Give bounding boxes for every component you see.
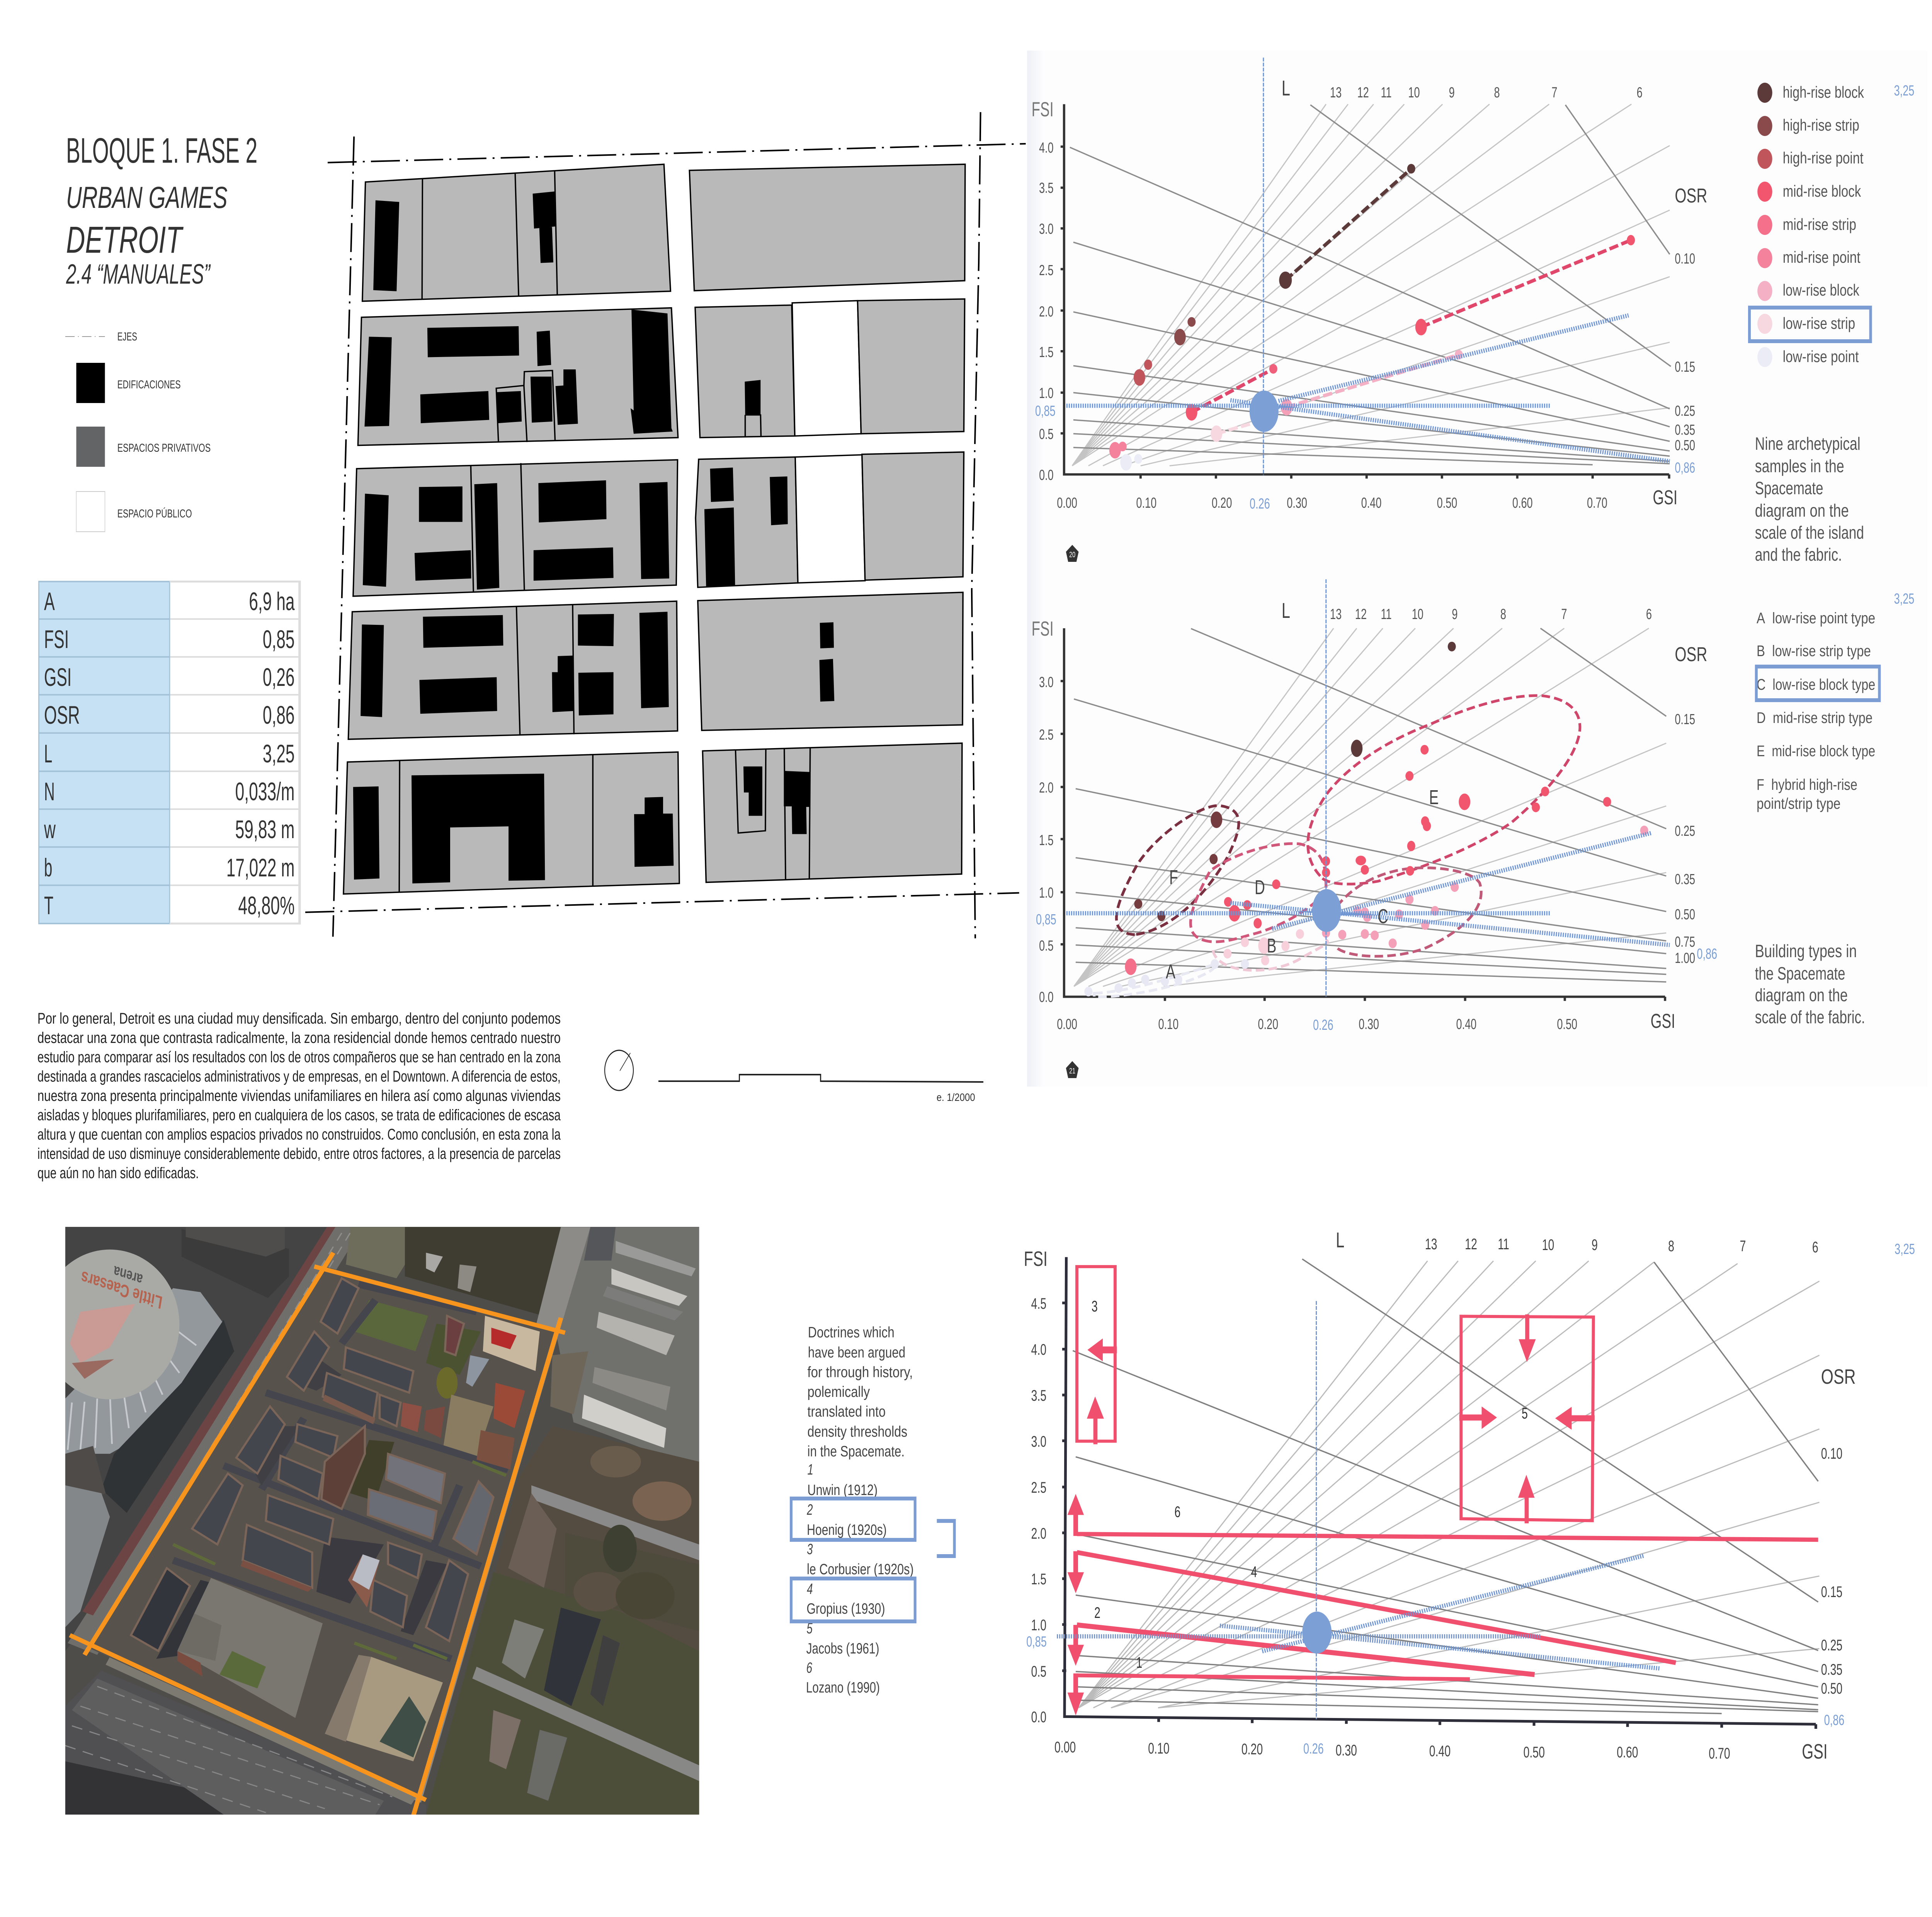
chart 3 axis labels: 0.10 — [1821, 1445, 1842, 1462]
chart 3 axis labels: 0.15 — [1821, 1584, 1842, 1601]
chart 2 page icon: 21 — [1069, 1067, 1075, 1075]
description paragraph: nuestra zona presenta principalmente viviendas unifamiliares en hilera así como algunas viviendas — [37, 1087, 561, 1104]
chart 1 axis labels: 1.0 — [1039, 384, 1054, 401]
data table: FSI — [44, 625, 69, 654]
chart 3 axis labels: 0.5 — [1031, 1663, 1046, 1680]
chart 2 type legend: D mid-rise strip type — [1757, 709, 1872, 726]
chart 1 axis labels: 0.35 — [1675, 421, 1695, 438]
chart 1 axis labels: 13 — [1330, 84, 1342, 100]
description paragraph: que aún no han sido edificadas. — [37, 1165, 199, 1182]
data table: 48,80% — [238, 891, 295, 920]
photo: residential buildings — [131, 1278, 493, 1651]
chart 3 blue values: 3,25 — [1895, 1240, 1915, 1257]
chart 2 type legend: A low-rise point type — [1757, 610, 1875, 627]
chart 2 type letters: A — [1166, 960, 1176, 983]
photo: green lots and trees — [350, 1300, 493, 1501]
description paragraph: estudio para comparar así los resultados con los de otros compañeros que se han centrado en la zona — [37, 1049, 561, 1066]
chart 2 type letters: F — [1169, 866, 1178, 889]
data table: L — [44, 740, 52, 768]
chart 3 axis labels: 1.5 — [1031, 1571, 1046, 1588]
chart 1 axis labels: 0.30 — [1287, 494, 1307, 511]
chart 3 axis labels: 0.0 — [1031, 1709, 1046, 1726]
doctrines list: Gropius (1930) — [806, 1600, 885, 1617]
chart 1 axis labels: 0.60 — [1512, 494, 1533, 511]
chart 1 blue site overlay — [1066, 58, 1670, 475]
chart 2 type letters: E — [1429, 786, 1439, 809]
chart 1 axis labels: 0.10 — [1136, 494, 1156, 511]
chart 3 blue values: 0,85 — [1026, 1633, 1047, 1650]
doctrines list: Lozano (1990) — [806, 1679, 880, 1696]
chart 3 axis labels: 6 — [1812, 1239, 1818, 1256]
chart 2 caption: Building types in — [1755, 942, 1857, 961]
photo: parking lot and hipped roof — [325, 1655, 443, 1761]
data table: T — [44, 891, 53, 920]
chart 1 type legend: high-rise strip — [1783, 116, 1859, 134]
chart 2 type letters: B — [1267, 934, 1276, 957]
chart 2 axis labels: 0.30 — [1359, 1015, 1379, 1032]
chart 1 axis labels: 0.00 — [1057, 494, 1077, 511]
chart 1 axis labels: 0.5 — [1039, 425, 1054, 442]
chart 2 OSR lines — [1074, 628, 1666, 982]
doctrines list: 2 — [806, 1501, 813, 1518]
chart 3 axis labels: 4.5 — [1031, 1295, 1046, 1312]
chart 2 axis labels: 0.0 — [1039, 988, 1054, 1005]
chart 2 blue values: 0,85 — [1036, 911, 1056, 927]
chart 2 caption: diagram on the — [1755, 986, 1848, 1005]
chart 2 axis labels: 0.50 — [1557, 1015, 1577, 1032]
chart 2 legend highlight box — [1756, 667, 1879, 700]
chart 1 type legend — [1757, 83, 1864, 367]
chart 3 axis labels: 1.0 — [1031, 1617, 1046, 1634]
data table: 0,033/m — [235, 777, 295, 806]
chart 1 caption: and the fabric. — [1755, 545, 1842, 565]
chart 3 axis labels: 4.0 — [1031, 1341, 1046, 1358]
doctrines list: for through history, — [808, 1364, 913, 1381]
chart 1 axis labels: 9 — [1449, 84, 1455, 100]
chart 2 axis labels: 3.0 — [1039, 674, 1054, 690]
chart 2 axis labels: 6 — [1646, 606, 1652, 622]
chart 1 axis labels: FSI — [1032, 98, 1054, 121]
chart 2 type letters: D — [1255, 876, 1265, 899]
legend: edificaciones — [76, 363, 181, 403]
chart 3 axis labels: L — [1336, 1228, 1344, 1252]
photo: arena lettering: Little Caesars — [80, 1267, 164, 1312]
chart 2 axis labels: 0.75 — [1675, 933, 1695, 950]
chart 1 axis labels: 2.5 — [1039, 262, 1054, 278]
title block: DETROIT — [66, 219, 184, 261]
data table: b — [44, 854, 52, 882]
chart 1 axis labels: 12 — [1357, 84, 1369, 100]
data table: 6,9 ha — [249, 587, 295, 616]
photo: large apartment block — [177, 1578, 323, 1718]
chart 1 type legend: low-rise point — [1783, 347, 1859, 366]
chart 2 axis labels: 2.0 — [1039, 779, 1054, 796]
chart 3 axis labels: GSI — [1802, 1740, 1828, 1763]
chart 3 arrows — [1068, 1314, 1595, 1715]
chart 2 type letters: C — [1378, 905, 1388, 928]
photo: orange site outline — [70, 1253, 565, 1816]
doctrines list: 3 — [807, 1541, 813, 1558]
legend: espacios privativos: ESPACIOS PRIVATIVOS — [117, 441, 211, 454]
chart 1 type legend: mid-rise block — [1783, 182, 1861, 200]
chart 2 axis labels: 12 — [1355, 606, 1367, 622]
chart 2 blue values: 0,86 — [1697, 945, 1717, 962]
photo: arena — [65, 1227, 289, 1627]
chart 1 axis labels: 4.0 — [1039, 139, 1054, 156]
chart 3 axis labels: 0.35 — [1821, 1661, 1842, 1678]
site axes — [305, 112, 1026, 938]
chart 3 axis labels: 12 — [1465, 1236, 1477, 1253]
chart 1 type legend: low-rise strip — [1783, 314, 1855, 332]
chart 3 doctrine numbers: 6 — [1174, 1504, 1180, 1521]
chart 2 axis labels: L — [1282, 599, 1290, 623]
doctrines list: 6 — [806, 1659, 812, 1676]
doctrines list: Hoenig (1920s) — [807, 1521, 887, 1538]
chart 3 doctrine numbers: 1 — [1136, 1654, 1142, 1671]
site plan map — [305, 112, 1026, 938]
chart 3 axis labels: 0.70 — [1709, 1745, 1730, 1762]
chart 2 caption: scale of the fabric. — [1755, 1008, 1865, 1027]
chart 2 axis labels: 0.15 — [1675, 711, 1695, 727]
chart 2 type legend: B low-rise strip type — [1757, 643, 1871, 660]
chart 3 doctrine numbers: 3 — [1092, 1298, 1098, 1315]
map legend — [65, 330, 211, 532]
chart 2 caption: the Spacemate — [1755, 964, 1845, 983]
chart 2 axis labels: 0.20 — [1258, 1015, 1278, 1032]
block row 1 — [362, 164, 965, 301]
photo: neighbouring buildings — [426, 1227, 699, 1801]
chart 1 axis labels: 3.5 — [1039, 179, 1054, 196]
chart 3 doctrine numbers: 4 — [1251, 1563, 1257, 1580]
doctrines list: le Corbusier (1920s) — [807, 1561, 914, 1578]
chart 1 blue values: 0,86 — [1675, 459, 1695, 476]
chart 1 axis labels: 0.20 — [1212, 494, 1232, 511]
description paragraph: aisladas y bloques plurifamiliares, pero en cualquiera de los casos, se trata de edificaciones de escasa — [37, 1107, 561, 1124]
chart 3 axis labels: 9 — [1592, 1237, 1598, 1254]
chart 3 blue values: 0.26 — [1303, 1740, 1324, 1757]
chart 3 OSR lines — [1073, 1259, 1818, 1713]
block row 5 — [344, 743, 962, 894]
description paragraph: destacar una zona que contrasta radicalmente, la zona residencial donde hemos centrado nuestro — [37, 1029, 561, 1046]
chart 1 axis labels: 0.40 — [1361, 494, 1381, 511]
chart 3 doctrine thresholds — [1077, 1267, 1818, 1679]
chart 1 axis labels: 10 — [1408, 84, 1420, 100]
chart 1 axis labels: 7 — [1551, 84, 1557, 100]
data table: 0,26 — [263, 663, 295, 692]
chart 2 axis labels: 1.0 — [1039, 884, 1054, 901]
chart 2 type legend: F hybrid high-rise — [1757, 776, 1857, 793]
chart 1 density rays — [1072, 104, 1670, 466]
chart 2 density rays — [1074, 628, 1666, 987]
data table: A — [44, 587, 55, 616]
chart 2 blue values — [1036, 590, 1914, 1033]
chart 1 caption: samples in the — [1755, 457, 1844, 476]
chart 3 axis labels: 0.50 — [1523, 1744, 1545, 1761]
chart 2 type letters — [1166, 786, 1439, 983]
data table: 0,85 — [263, 625, 295, 654]
chart 1 axis labels: L — [1282, 76, 1290, 100]
doctrines list: Doctrines which — [808, 1324, 895, 1341]
block row 4 — [348, 592, 963, 739]
chart 2 axis labels: 1.5 — [1039, 832, 1054, 848]
chart 2 axis labels: 8 — [1500, 606, 1506, 622]
chart 2 axis labels: 0.5 — [1039, 937, 1054, 954]
block row 3 — [353, 452, 964, 596]
chart 3 axis labels: 0.10 — [1148, 1740, 1170, 1757]
chart 3 axis labels: 11 — [1498, 1236, 1509, 1253]
chart 1 axis labels: 3.0 — [1039, 220, 1054, 237]
chart 1 axis labels: 0.10 — [1675, 250, 1695, 267]
chart 2 blue site overlay — [1066, 579, 1670, 997]
chart 2 page icon — [1066, 1061, 1078, 1078]
chart 1 axis labels: GSI — [1653, 486, 1677, 509]
photo: surrounding ground — [65, 1227, 699, 1815]
chart 1 axis labels: 0.70 — [1587, 494, 1607, 511]
chart 1 type legend: high-rise point — [1783, 149, 1864, 167]
chart 1 caption: diagram on the — [1755, 501, 1849, 520]
chart 3 blue site overlay — [1057, 1301, 1660, 1719]
chart 1 caption — [1755, 434, 1864, 565]
title block — [66, 131, 257, 290]
chart 2 axes — [1061, 628, 1665, 1001]
chart 1 type legend: high-rise block — [1783, 83, 1864, 101]
chart 1 page icon: 20 — [1069, 550, 1075, 559]
chart 1 blue values: 3,25 — [1894, 82, 1914, 99]
description paragraph: destinada a grandes rascacielos administrativos y de empresas, en el Downtown. A diferencia de estos, — [37, 1068, 561, 1085]
chart 3 axis labels: 10 — [1542, 1237, 1554, 1254]
chart 1 axis labels: 0.50 — [1437, 494, 1457, 511]
chart 2 axis labels: 7 — [1561, 606, 1567, 622]
chart 3 blue values — [1026, 1240, 1915, 1757]
chart 3 axis labels: 2.5 — [1031, 1479, 1046, 1496]
description paragraph: Por lo general, Detroit es una ciudad muy densificada. Sin embargo, dentro del conjunto podemos — [37, 1010, 561, 1027]
legend: edificaciones: EDIFICACIONES — [117, 378, 181, 391]
doctrines list: density thresholds — [808, 1423, 907, 1440]
doctrines list: polemically — [808, 1383, 870, 1400]
chart 2 blue values: 0.26 — [1313, 1016, 1333, 1033]
chart 3 axis labels: 3.0 — [1031, 1433, 1046, 1450]
chart 3 axes — [1062, 1257, 1816, 1729]
chart 1 axis labels: 0.15 — [1675, 358, 1695, 375]
chart 1 legend highlight box — [1750, 308, 1871, 341]
doctrines list: have been argued — [808, 1344, 905, 1361]
chart 3 axis labels: 7 — [1740, 1238, 1746, 1255]
chart 2 axis labels: 0.50 — [1675, 906, 1695, 922]
chart 2 axis labels: 0.40 — [1456, 1015, 1476, 1032]
block row 2 — [358, 299, 965, 446]
chart 2 axis labels: 13 — [1330, 606, 1342, 622]
chart 2 axis labels: 1.00 — [1675, 949, 1695, 966]
chart 2 blue values: 3,25 — [1894, 590, 1914, 607]
aerial photo of the site — [40, 1227, 699, 1816]
chart 2 type clusters — [1094, 696, 1580, 997]
legend: ejes: EJES — [117, 330, 137, 343]
chart 3 axis labels: 2.0 — [1031, 1525, 1046, 1542]
chart 1 caption: Nine archetypical — [1755, 434, 1861, 454]
chart 1 blue values: 0,85 — [1035, 402, 1056, 419]
chart 2 type legend: point/strip type — [1757, 795, 1840, 812]
doctrines list: in the Spacemate. — [808, 1443, 905, 1460]
chart 1 type legend: mid-rise point — [1783, 248, 1861, 266]
spacemate chart 1: archetypical samples — [1027, 51, 1928, 570]
chart 1 sample dots and ranges — [1109, 164, 1635, 471]
title block: 2.4 “MANUALES” — [66, 259, 211, 290]
chart 3 axis labels: 0.25 — [1821, 1637, 1842, 1654]
data table: 3,25 — [263, 740, 295, 768]
chart 3 axis labels: FSI — [1024, 1247, 1048, 1271]
chart 3 axis labels: 13 — [1425, 1236, 1437, 1253]
spacemate chart 2: building types — [1027, 570, 1928, 1087]
photo: arena lettering: arena — [112, 1262, 144, 1288]
data table: 0,86 — [263, 701, 295, 730]
description paragraph — [37, 1010, 561, 1182]
chart 3 doctrine numbers: 5 — [1522, 1405, 1528, 1422]
legend: espacio publico: ESPACIO PÚBLICO — [117, 507, 192, 520]
data table: w — [44, 815, 56, 844]
photo: site ground — [87, 1267, 559, 1797]
north compass — [605, 1050, 633, 1090]
chart 1 OSR lines — [1070, 105, 1671, 465]
chart 2 axis labels: OSR — [1675, 643, 1707, 666]
chart 3 doctrine numbers: 2 — [1094, 1604, 1100, 1621]
chart 1 caption: Spacemate — [1755, 479, 1823, 498]
chart 1 axes — [1061, 104, 1669, 478]
spacemate chart 3: doctrines — [1024, 1228, 1915, 1763]
data table: 17,022 m — [226, 854, 295, 882]
chart 3 density rays — [1079, 1261, 1819, 1708]
scale bar — [658, 1075, 983, 1104]
chart 2 axis labels: FSI — [1032, 617, 1054, 640]
chart 1 axis labels: 0.50 — [1675, 437, 1695, 453]
description paragraph: intensidad de uso disminuye considerablemente debido, entre otros factores, a la presencia de parcelas — [37, 1145, 561, 1162]
data table: OSR — [44, 701, 80, 730]
chart 1 axis labels: 11 — [1381, 84, 1392, 100]
chart 3 doctrine numbers — [1092, 1298, 1528, 1671]
chart 1 axis labels: 0.0 — [1039, 466, 1054, 483]
doctrines highlight boxes — [791, 1499, 954, 1621]
legend: espacio publico — [76, 492, 192, 532]
doctrines list: translated into — [808, 1403, 886, 1420]
chart 2 axis labels — [1032, 599, 1707, 1032]
chart 3 blue values: 0,86 — [1824, 1711, 1844, 1728]
chart 2 axis labels: 9 — [1452, 606, 1458, 622]
chart 1 axis labels: 0.25 — [1675, 402, 1695, 419]
chart 2 axis labels: 0.25 — [1675, 822, 1695, 839]
chart 3 axis labels: 0.00 — [1054, 1739, 1076, 1756]
doctrines list — [806, 1324, 914, 1696]
chart 2 axis labels: 11 — [1381, 606, 1392, 622]
chart 3 axis labels: 0.50 — [1821, 1680, 1842, 1697]
chart 3 axis labels: OSR — [1821, 1365, 1856, 1388]
chart 2 axis labels: 0.00 — [1057, 1015, 1077, 1032]
legend: espacios privativos — [76, 427, 211, 467]
chart 2 axis labels: 2.5 — [1039, 726, 1054, 743]
chart 2 type legend: C low-rise block type — [1757, 676, 1875, 693]
doctrines list: 1 — [808, 1461, 813, 1478]
chart 1 axis labels — [1032, 76, 1707, 511]
doctrines list: Jacobs (1961) — [806, 1640, 879, 1657]
doctrines list: 5 — [806, 1620, 813, 1637]
chart 3 axis labels: 0.40 — [1429, 1743, 1451, 1760]
description paragraph: altura y que cuentan con amplios espacios privados no construidos. Como conclusión, en esta zona la — [37, 1126, 561, 1143]
chart 1 type legend: low-rise block — [1783, 281, 1860, 299]
title block: BLOQUE 1. FASE 2 — [66, 131, 257, 170]
chart 1 axis labels: 8 — [1494, 84, 1500, 100]
chart 3 axis labels: 0.30 — [1335, 1742, 1357, 1759]
chart 1 blue values — [1035, 82, 1914, 512]
photo: brick buildings — [240, 1316, 540, 1607]
data table — [38, 581, 300, 924]
title block: URBAN GAMES — [66, 180, 228, 214]
chart 2 type legend: E mid-rise block type — [1757, 743, 1875, 760]
doctrines list: Unwin (1912) — [808, 1482, 878, 1499]
scale bar: e. 1/2000 — [937, 1092, 975, 1104]
chart 2 type legend — [1757, 610, 1875, 812]
chart 1 type legend: mid-rise strip — [1783, 215, 1856, 233]
chart 3 axis labels — [1024, 1228, 1856, 1763]
chart 1 caption: scale of the island — [1755, 523, 1864, 543]
chart 2 axis labels: GSI — [1651, 1010, 1675, 1032]
chart 3 axis labels: 0.60 — [1617, 1744, 1638, 1761]
chart 1 blue values: 0.26 — [1250, 495, 1270, 512]
chart 2 axis labels: 0.35 — [1675, 871, 1695, 887]
data table: 59,83 m — [235, 815, 295, 844]
chart 2 axis labels: 10 — [1412, 606, 1423, 622]
chart 2 axis labels: 0.10 — [1158, 1015, 1179, 1032]
photo: streets and dark drives inside the site — [156, 1284, 508, 1659]
doctrines list: 4 — [807, 1580, 813, 1597]
chart 1 page icon — [1066, 545, 1078, 562]
chart 1 axis labels: OSR — [1675, 184, 1707, 207]
chart 3 axis labels: 0.20 — [1242, 1741, 1263, 1758]
chart 1 axis labels: 2.0 — [1039, 303, 1054, 320]
chart 3 axis labels: 8 — [1668, 1238, 1674, 1255]
chart 2 sample dots — [1084, 642, 1648, 997]
data table: N — [44, 777, 55, 806]
chart 1 axis labels: 1.5 — [1039, 344, 1054, 360]
chart 1 axis labels: 6 — [1637, 84, 1643, 100]
data table: GSI — [44, 663, 71, 692]
chart 3 axis labels: 3.5 — [1031, 1387, 1046, 1404]
chart 2 caption — [1755, 942, 1865, 1027]
